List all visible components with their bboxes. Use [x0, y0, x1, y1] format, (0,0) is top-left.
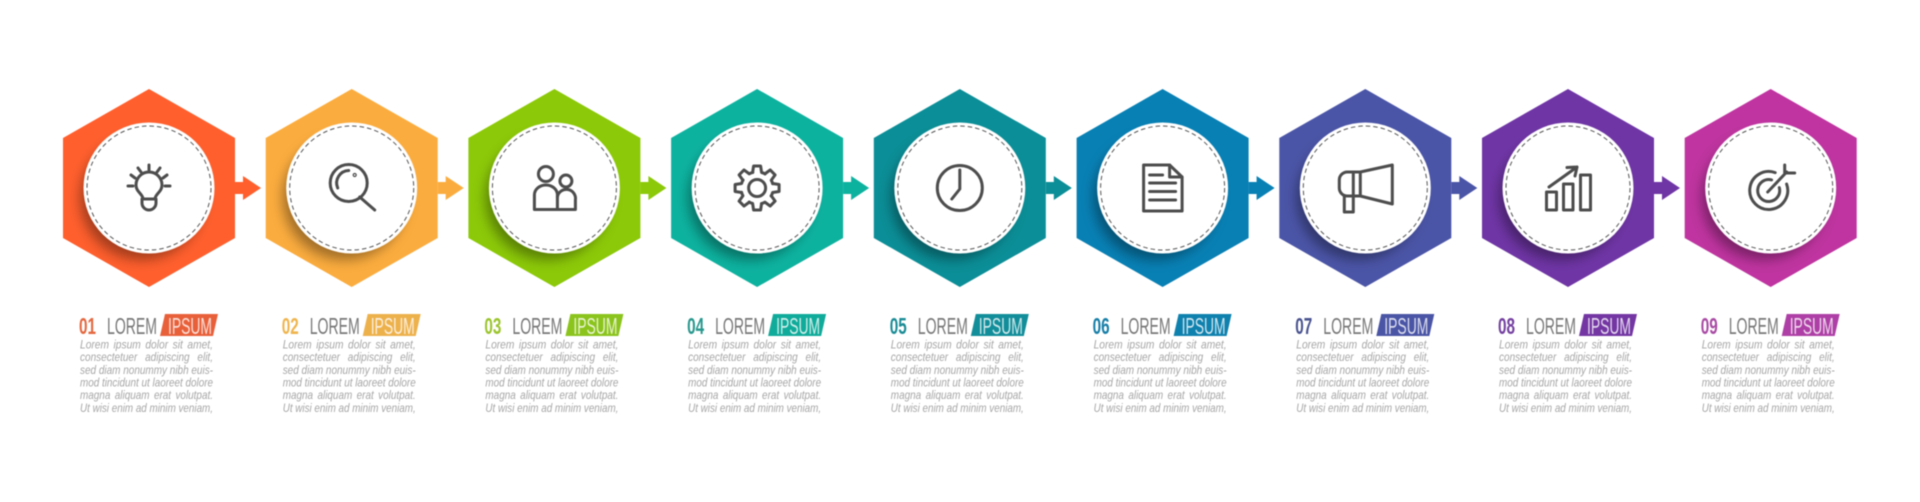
body text 02: consectetuer adipiscing elit, [283, 350, 416, 364]
body text 01: magna aliquam erat volutpat. [80, 388, 213, 402]
step 07 [1279, 89, 1477, 415]
number 06: 06 [1093, 313, 1110, 339]
body text 05: Lorem ipsum dolor sit amet, [891, 338, 1024, 352]
heading 05: LOREM [918, 313, 968, 339]
circle 05 [894, 122, 1025, 254]
tag 03 [565, 313, 623, 339]
icon: magnifying glass [330, 164, 375, 210]
body text 04: magna aliquam erat volutpat. [688, 388, 821, 402]
hexagon 06 [1077, 89, 1249, 287]
body text 05: mod tincidunt ut laoreet dolore [891, 376, 1024, 390]
body text 01: sed diam nonummy nibh euis- [80, 363, 213, 377]
body text 05 [891, 338, 1024, 415]
hexagon 07 [1279, 89, 1451, 287]
body text 08: sed diam nonummy nibh euis- [1499, 363, 1632, 377]
arrow 07 [1451, 176, 1477, 200]
step 03 [468, 89, 666, 415]
arrow 02 [438, 176, 464, 200]
arrow 06 [1249, 176, 1275, 200]
step 08 [1482, 89, 1680, 415]
body text 09: Ut wisi enim ad minim veniam, [1702, 401, 1835, 415]
hexagon 01 [63, 89, 235, 287]
tag 04 [768, 313, 826, 339]
body text 02 [283, 338, 416, 415]
body text 04: consectetuer adipiscing elit, [688, 350, 821, 364]
arrow 05 [1046, 176, 1072, 200]
body text 05: magna aliquam erat volutpat. [891, 388, 1024, 402]
icon: megaphone [1339, 165, 1392, 212]
number 04: 04 [687, 313, 704, 339]
icon: gear [735, 166, 779, 210]
body text 01: mod tincidunt ut laoreet dolore [80, 376, 213, 390]
circle 04 [692, 122, 823, 254]
body text 04: sed diam nonummy nibh euis- [688, 363, 821, 377]
body text 07 [1296, 338, 1430, 415]
body text 01: Ut wisi enim ad minim veniam, [80, 401, 213, 415]
tag 01: IPSUM [168, 313, 212, 339]
body text 04: Ut wisi enim ad minim veniam, [688, 401, 821, 415]
tag 05: IPSUM [979, 313, 1023, 339]
hexagon 03 [468, 89, 640, 287]
tag 06: IPSUM [1182, 313, 1226, 339]
body text 06: mod tincidunt ut laoreet dolore [1094, 376, 1227, 390]
heading 02: LOREM [310, 313, 360, 339]
body text 03: Lorem ipsum dolor sit amet, [485, 338, 618, 352]
body text 05: sed diam nonummy nibh euis- [891, 363, 1024, 377]
tag 06 [1174, 313, 1232, 339]
number 03: 03 [484, 313, 501, 339]
tag 04: IPSUM [776, 313, 820, 339]
body text 03 [485, 338, 619, 415]
body text 04 [688, 338, 821, 415]
heading 09: LOREM [1729, 313, 1779, 339]
body text 05: consectetuer adipiscing elit, [891, 350, 1024, 364]
circle 01 [84, 122, 214, 254]
heading 03: LOREM [512, 313, 562, 339]
body text 03: Ut wisi enim ad minim veniam, [485, 401, 618, 415]
body text 03: sed diam nonummy nibh euis- [485, 363, 618, 377]
tag 09: IPSUM [1790, 313, 1834, 339]
body text 02: Lorem ipsum dolor sit amet, [283, 338, 416, 352]
body text 03: magna aliquam erat volutpat. [485, 388, 618, 402]
tag 02 [363, 313, 421, 339]
step 04 [671, 89, 869, 415]
circle 07 [1300, 122, 1431, 254]
hexagon 02 [266, 89, 438, 287]
body text 04: Lorem ipsum dolor sit amet, [688, 338, 821, 352]
step 09 [1685, 89, 1857, 415]
step 02 [266, 89, 464, 415]
body text 06: Lorem ipsum dolor sit amet, [1094, 338, 1227, 352]
body text 06 [1094, 338, 1227, 415]
circle 03 [489, 122, 620, 254]
tag 09 [1782, 313, 1840, 339]
body text 08: mod tincidunt ut laoreet dolore [1499, 376, 1632, 390]
body text 08: consectetuer adipiscing elit, [1499, 350, 1632, 364]
tag 08: IPSUM [1587, 313, 1631, 339]
arrow 04 [843, 176, 869, 200]
body text 09: consectetuer adipiscing elit, [1702, 350, 1835, 364]
body text 08: magna aliquam erat volutpat. [1499, 388, 1632, 402]
body text 02: mod tincidunt ut laoreet dolore [283, 376, 416, 390]
body text 05: Ut wisi enim ad minim veniam, [891, 401, 1024, 415]
body text 09: magna aliquam erat volutpat. [1702, 388, 1835, 402]
body text 01: consectetuer adipiscing elit, [80, 350, 213, 364]
hexagon 05 [874, 89, 1046, 287]
body text 06: magna aliquam erat volutpat. [1094, 388, 1227, 402]
icon: clock [937, 166, 982, 210]
body text 07: magna aliquam erat volutpat. [1296, 388, 1429, 402]
infographic: nine step process [62, 88, 1858, 414]
body text 02: sed diam nonummy nibh euis- [283, 363, 416, 377]
tag 02: IPSUM [371, 313, 415, 339]
body text 01: Lorem ipsum dolor sit amet, [80, 338, 213, 352]
body text 07: Ut wisi enim ad minim veniam, [1296, 401, 1429, 415]
body text 07: Lorem ipsum dolor sit amet, [1296, 338, 1429, 352]
step 05 [874, 89, 1072, 415]
icon: people [534, 166, 576, 210]
body text 06: consectetuer adipiscing elit, [1094, 350, 1227, 364]
tag 08 [1579, 313, 1637, 339]
number 05: 05 [890, 313, 907, 339]
number 01: 01 [79, 313, 96, 339]
body text 03: consectetuer adipiscing elit, [485, 350, 618, 364]
arrow 08 [1654, 176, 1680, 200]
heading 08: LOREM [1526, 313, 1576, 339]
tag 07 [1376, 313, 1434, 339]
body text 07: sed diam nonummy nibh euis- [1296, 363, 1429, 377]
heading 01: LOREM [107, 313, 157, 339]
icon: target [1750, 165, 1795, 209]
heading 06: LOREM [1121, 313, 1171, 339]
heading 07: LOREM [1323, 313, 1373, 339]
body text 06: sed diam nonummy nibh euis- [1094, 363, 1227, 377]
body text 02: magna aliquam erat volutpat. [283, 388, 416, 402]
tag 05 [971, 313, 1029, 339]
hexagon 08 [1482, 89, 1654, 287]
arrow 01 [235, 176, 261, 200]
body text 09: mod tincidunt ut laoreet dolore [1702, 376, 1835, 390]
body text 08: Ut wisi enim ad minim veniam, [1499, 401, 1632, 415]
number 08: 08 [1498, 313, 1515, 339]
step 01 [63, 89, 261, 415]
body text 09: Lorem ipsum dolor sit amet, [1702, 338, 1835, 352]
body text 01 [80, 338, 213, 415]
heading 04: LOREM [715, 313, 765, 339]
body text 06: Ut wisi enim ad minim veniam, [1094, 401, 1227, 415]
body text 04: mod tincidunt ut laoreet dolore [688, 376, 821, 390]
body text 08 [1499, 338, 1632, 415]
tag 03: IPSUM [573, 313, 617, 339]
icon: document [1144, 165, 1182, 211]
body text 07: mod tincidunt ut laoreet dolore [1296, 376, 1430, 390]
body text 07: consectetuer adipiscing elit, [1296, 350, 1429, 364]
tag 07: IPSUM [1384, 313, 1428, 339]
circle 08 [1502, 122, 1634, 254]
icon: rising bar chart [1546, 167, 1590, 210]
hexagon 09 [1685, 89, 1857, 287]
circle 09 [1705, 122, 1836, 254]
body text 09 [1702, 338, 1835, 415]
body text 08: Lorem ipsum dolor sit amet, [1499, 338, 1632, 352]
icon: light bulb [128, 165, 170, 210]
number 07: 07 [1295, 313, 1312, 339]
circle 02 [286, 122, 417, 254]
hexagon 04 [671, 89, 843, 287]
body text 09: sed diam nonummy nibh euis- [1702, 363, 1835, 377]
body text 03: mod tincidunt ut laoreet dolore [485, 376, 619, 390]
arrow 03 [640, 176, 666, 200]
step 06 [1077, 89, 1275, 415]
number 02: 02 [282, 313, 299, 339]
number 09: 09 [1701, 313, 1718, 339]
tag 01 [160, 313, 218, 339]
circle 06 [1097, 122, 1228, 254]
body text 02: Ut wisi enim ad minim veniam, [283, 401, 416, 415]
